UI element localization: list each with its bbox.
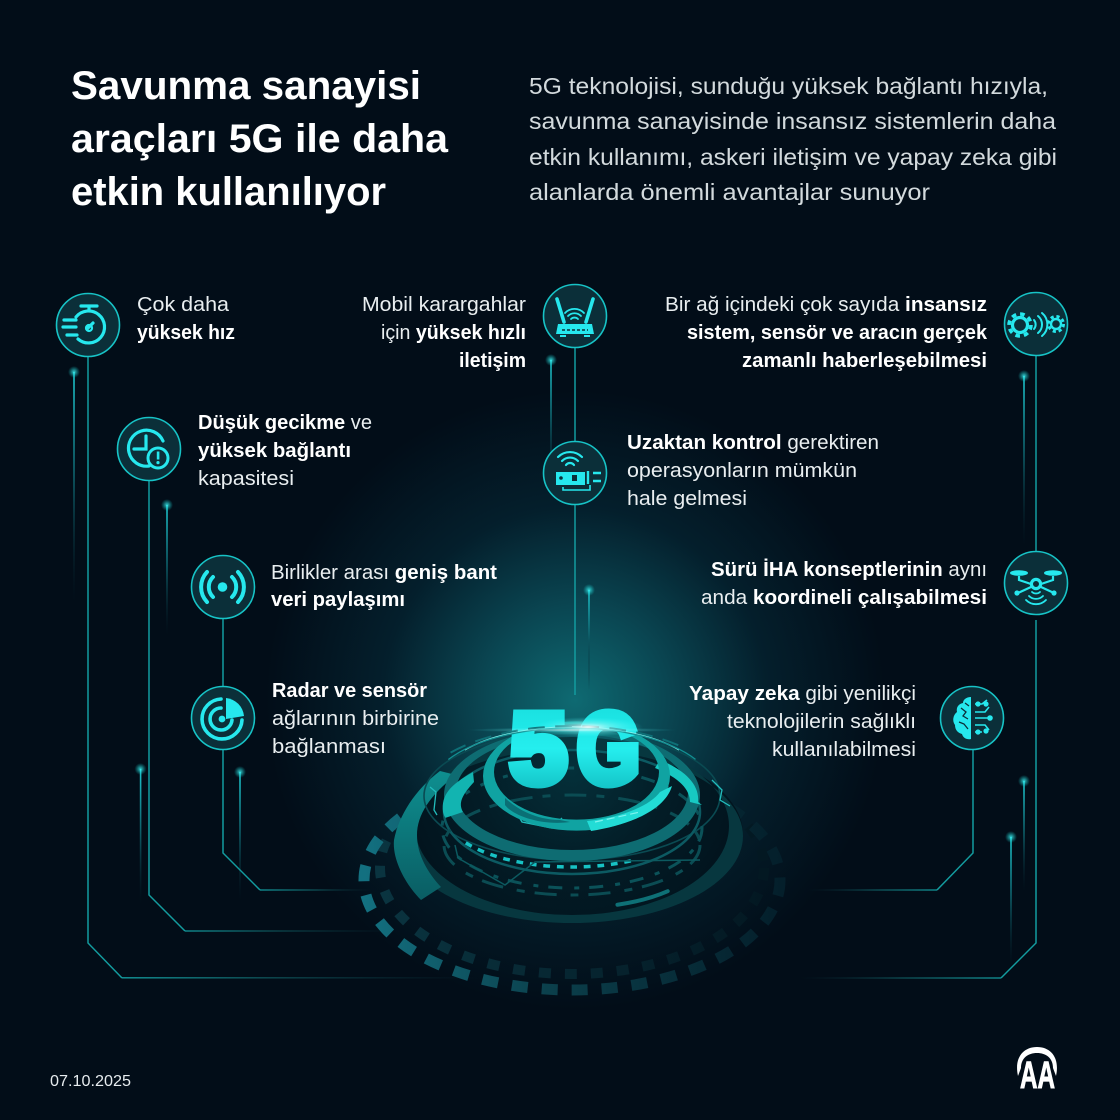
text	[627, 432, 879, 510]
item: yüksek hız	[56, 294, 235, 356]
text	[701, 558, 987, 609]
text: anda koordineli çalışabilmesi	[701, 587, 987, 609]
intro text: alanlarda önemli avantajlar sunuyor	[529, 179, 930, 205]
item: yapay zeka	[689, 683, 1004, 761]
item: mobil karargahlar	[362, 284, 606, 372]
text	[198, 412, 372, 490]
intro text: etkin kullanımı, askeri iletişim ve yapay zeka gibi	[529, 144, 1057, 170]
text: kapasitesi	[198, 468, 294, 490]
title: etkin kullanılıyor	[71, 170, 386, 214]
icon: clock and alert	[118, 418, 180, 480]
title: Savunma sanayisi	[71, 64, 421, 108]
icon: stopwatch	[56, 294, 120, 356]
item: geniş bant	[192, 556, 497, 618]
text	[665, 294, 988, 372]
text	[137, 294, 235, 344]
text	[272, 680, 439, 758]
text: iletişim	[459, 350, 526, 372]
top thin arcs	[414, 726, 730, 874]
text: hale gelmesi	[627, 488, 747, 510]
icon: gears and signal	[1004, 292, 1068, 356]
icon: wifi extender	[544, 442, 606, 504]
icon: radar	[192, 686, 254, 750]
item: uzaktan kontrol	[544, 432, 879, 510]
middle rings	[424, 732, 730, 908]
bright second ring	[444, 729, 700, 861]
text: Yapay zeka gibi yenilikçi	[689, 683, 916, 705]
text: Bir ağ içindeki çok sayıda insansız	[665, 294, 987, 316]
decorative light streaks	[68, 354, 1030, 967]
intro text: savunma sanayisinde insansız sistemlerin daha	[529, 108, 1056, 134]
text	[689, 683, 916, 761]
text: sistem, sensör ve aracın gerçek	[687, 322, 988, 344]
text	[271, 562, 497, 611]
text: ağlarının birbirine	[272, 708, 439, 730]
central 5G platform	[364, 693, 780, 990]
5G lettering: 5	[510, 693, 567, 805]
outer dashed rings	[364, 762, 780, 990]
icon: brain circuit	[940, 686, 1004, 750]
text: operasyonların mümkün	[627, 460, 857, 482]
text: yüksek hız	[137, 322, 235, 344]
icon: router	[544, 284, 606, 348]
text	[362, 294, 526, 372]
central glow	[265, 390, 885, 1010]
dark disc	[401, 745, 743, 923]
5G lettering	[510, 693, 640, 805]
date: 07.10.2025	[50, 1073, 131, 1090]
text: bağlanması	[272, 736, 386, 758]
text: Radar ve sensör	[272, 680, 427, 702]
logo: AA: AA	[1020, 1055, 1055, 1097]
bright inner crescent	[483, 721, 670, 831]
flare	[533, 717, 643, 737]
text: Sürü İHA konseptlerinin aynı	[711, 558, 987, 581]
intro text	[529, 73, 1057, 205]
text: Çok daha	[137, 294, 230, 316]
item: radar	[192, 680, 439, 758]
connector lines	[88, 346, 1036, 978]
text: kullanılabilmesi	[772, 739, 916, 761]
left thick segment	[394, 771, 456, 900]
5G lettering: G	[577, 693, 640, 805]
item: sürü İHA	[701, 552, 1068, 614]
thick outer ring	[401, 737, 743, 923]
text: Düşük gecikme ve	[198, 412, 372, 434]
text: için yüksek hızlı	[381, 322, 526, 344]
item: düşük gecikme	[118, 412, 372, 490]
icon: drone	[1004, 552, 1068, 614]
item: insansız sistem	[665, 292, 1068, 372]
text: teknolojilerin sağlıklı	[727, 711, 916, 733]
text: Birlikler arası geniş bant	[271, 562, 497, 584]
title	[71, 64, 449, 214]
text: yüksek bağlantı	[198, 440, 351, 462]
text: zamanlı haberleşebilmesi	[742, 350, 987, 372]
title: araçları 5G ile daha	[71, 117, 449, 161]
icon: signal	[192, 556, 254, 618]
intro text: 5G teknolojisi, sunduğu yüksek bağlantı hızıyla,	[529, 73, 1048, 99]
logo: AA	[1017, 1047, 1057, 1097]
text: veri paylaşımı	[271, 589, 405, 611]
text: Mobil karargahlar	[362, 294, 526, 316]
text: Uzaktan kontrol gerektiren	[627, 432, 879, 454]
